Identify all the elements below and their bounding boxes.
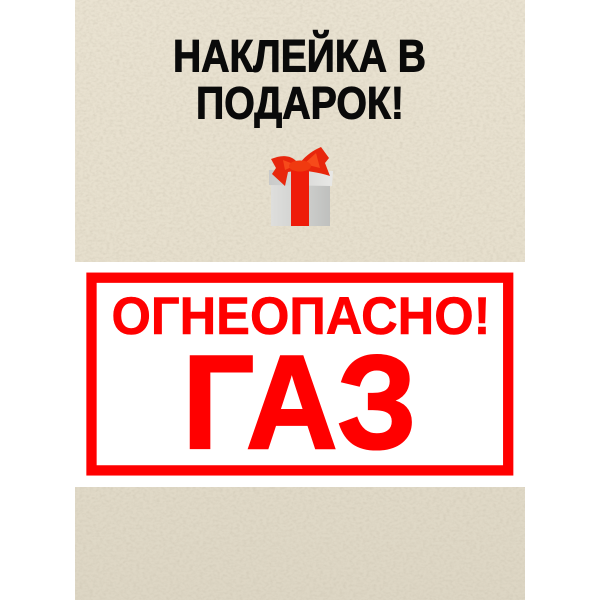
title: НАКЛЕЙКА В [173,30,426,82]
panel: white sign band [75,262,525,487]
title [173,30,426,128]
title: ПОДАРОК! [196,78,404,128]
gas label: ГАЗ [182,329,416,477]
panel: red sign frame [92,278,508,470]
panel: beige textured background [75,0,525,600]
warning text: ОГНЕОПАСНО! [112,287,490,346]
icon: gift box [269,147,333,226]
